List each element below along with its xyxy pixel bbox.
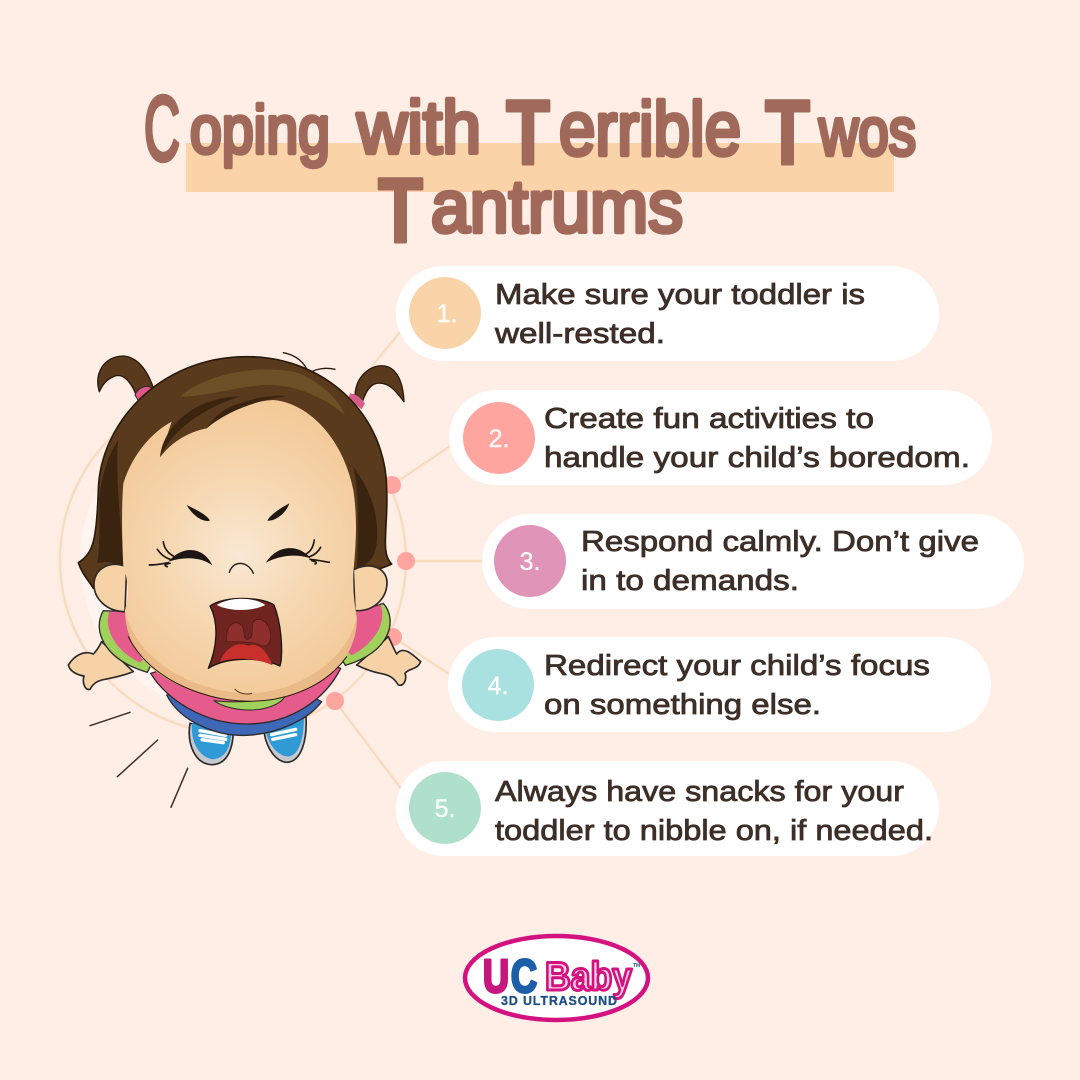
cheek shadow (125, 610, 357, 701)
title: T (506, 82, 550, 184)
tip 2: 2. (489, 425, 509, 453)
logo (465, 936, 648, 1020)
number badge 1 (409, 277, 481, 349)
tip 3 (482, 514, 1024, 609)
mouth (208, 598, 282, 668)
title: wos (818, 94, 916, 170)
tip 3: 3. (520, 548, 540, 576)
decorative ring behind child (60, 387, 406, 733)
tip 4: 4. (488, 672, 508, 700)
right closed eye (266, 540, 329, 564)
tip 4: on something else. (544, 689, 821, 721)
right sleeve (327, 603, 390, 665)
title: with (356, 86, 481, 169)
logo: U (483, 950, 509, 1002)
tip 1: well-rested. (494, 318, 665, 350)
shirt collar (214, 695, 286, 710)
title: C (144, 78, 180, 180)
tip 3: in to demands. (581, 565, 799, 597)
number badge 5 (409, 772, 481, 844)
number badge 2 (463, 402, 535, 474)
title highlight band (186, 143, 894, 192)
left closed eye (149, 542, 212, 567)
stomp lines (90, 712, 188, 807)
tip 1: 1. (437, 300, 457, 328)
title: T (765, 82, 810, 184)
tip 2: handle your child’s boredom. (544, 442, 970, 474)
child illustration (68, 353, 421, 807)
left sleeve (99, 611, 167, 672)
tip 2: Create fun activities to (544, 403, 874, 435)
title: antrums (431, 165, 683, 248)
left arm and hand (68, 642, 133, 689)
left pigtail (98, 356, 154, 403)
left ear (94, 564, 127, 612)
title: T (378, 160, 423, 262)
title: errible (559, 87, 741, 172)
tip 5: toddler to nibble on, if needed. (495, 815, 933, 847)
face (122, 400, 357, 701)
tip 3: Respond calmly. Don’t give (581, 526, 979, 558)
connector dots (326, 476, 415, 710)
tip 5 (396, 761, 939, 856)
title (144, 78, 916, 262)
hair highlight (180, 369, 345, 415)
shirt (151, 640, 341, 724)
hair side shadows (97, 440, 377, 570)
logo: 3D ULTRASOUND (501, 994, 617, 1008)
pants (167, 687, 322, 735)
tip 1: Make sure your toddler is (495, 279, 865, 311)
fringe strands (160, 396, 287, 457)
tip 4 (448, 637, 991, 732)
right eyebrow (267, 503, 289, 521)
tip 1 (396, 266, 939, 361)
hair (78, 357, 392, 588)
tip 5: Always have snacks for your (495, 776, 904, 808)
number badge 3 (494, 525, 566, 597)
right ear (353, 566, 387, 611)
left shoe (189, 723, 233, 765)
logo: C (511, 950, 537, 1002)
tip 2 (449, 390, 992, 485)
title: oping (190, 92, 330, 168)
chin outline (128, 637, 347, 701)
right pigtail (348, 366, 404, 409)
right arm and hand (357, 637, 421, 685)
right shoe (264, 717, 306, 762)
nose (229, 563, 253, 573)
left eyebrow (187, 505, 210, 521)
stray hairs (283, 353, 335, 373)
tip 4: Redirect your child’s focus (544, 650, 930, 682)
tip 5: 5. (435, 795, 455, 823)
chin crease (235, 689, 252, 694)
logo: Baby (545, 955, 633, 999)
logo: TM (633, 963, 640, 969)
number badge 4 (462, 649, 534, 721)
connector lines (335, 332, 484, 790)
